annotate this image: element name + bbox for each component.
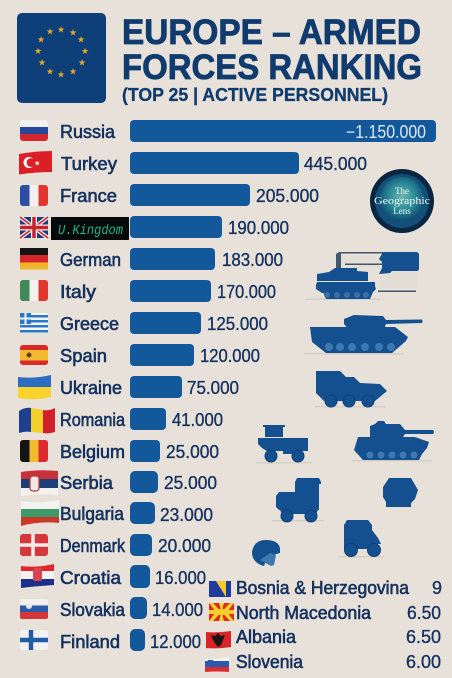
icon: Greece flag (20, 313, 48, 333)
icon: armored personnel carrier (315, 371, 387, 408)
row: Turkey: 445.000 (304, 154, 367, 174)
row: Belgium: Belgium (60, 442, 125, 462)
row: Denmark: Denmark (60, 536, 126, 556)
row: Ukraine (18, 375, 239, 399)
row: Croatia (21, 564, 206, 588)
logo: The Geographic Lens (370, 169, 434, 233)
row: Croatia: Croatia (60, 568, 122, 588)
row: France: France (60, 186, 117, 206)
icon: Slovakia flag (20, 599, 48, 619)
row: Serbia: 25.000 (164, 473, 217, 493)
title (122, 13, 422, 87)
icon: Romania flag (19, 408, 55, 433)
row: Greece: Greece (60, 314, 119, 334)
row: Serbia: Serbia (60, 473, 114, 493)
row: Bosnia & Herzegovina: 9 (432, 578, 442, 598)
logo: The Geographic Lens: Lens (393, 206, 411, 216)
icon: EU flag: ★ (46, 66, 54, 76)
row: Albania (206, 627, 441, 648)
row: Slovakia: 14.000 (152, 600, 203, 620)
row: Finland: 12.000 (150, 632, 201, 652)
icon: UK flag (20, 217, 48, 238)
icon: tank with glitched background (305, 252, 419, 300)
row: North Macedonia: North Macedonia (236, 603, 372, 623)
icon: Denmark flag (20, 534, 48, 556)
row: U.Kingdom: 190.000 (228, 218, 289, 238)
row: Turkey: Turkey (61, 154, 117, 174)
icon: armored vehicle (272, 478, 324, 522)
row: Denmark (20, 534, 211, 556)
icon: EU flag: ★ (38, 58, 46, 68)
row: U.Kingdom (20, 216, 289, 240)
row: Italy (20, 280, 276, 302)
icon: Italy flag (20, 280, 48, 301)
icon: Finland flag (20, 630, 48, 650)
icon: Turkey flag: ★ (34, 160, 40, 168)
row: Slovakia (20, 597, 203, 620)
row: Spain (20, 344, 260, 366)
row: Albania: Albania (236, 627, 297, 647)
row: Finland: Finland (60, 632, 120, 652)
title: EUROPE – ARMED (122, 13, 421, 52)
row: Croatia: 16.000 (155, 568, 206, 588)
row: Bulgaria: 23.000 (160, 505, 213, 525)
icon: Germany flag (20, 248, 48, 270)
row: Slovakia: Slovakia (60, 600, 126, 620)
icon: EU flag: ★ (57, 70, 65, 80)
row: Romania (19, 408, 223, 433)
icon: Albania flag (206, 631, 231, 648)
row: North Macedonia (209, 603, 441, 623)
icon: army truck (256, 425, 312, 464)
icon: EU flag: ★ (57, 24, 65, 34)
icon: North Macedonia flag (209, 603, 234, 621)
icon: EU flag: ★ (34, 46, 42, 56)
row: France: 205.000 (256, 186, 319, 206)
icon: Turkey flag (19, 151, 52, 174)
subtitle: (TOP 25 | ACTIVE PERSONNEL) (122, 85, 388, 105)
row: Albania: 6.50 (406, 627, 441, 647)
logo: The Geographic Lens: Geographic (374, 195, 430, 207)
row: Slovenia: Slovenia (236, 652, 304, 672)
icon: light tank (352, 421, 434, 462)
logo: The Geographic Lens: The (395, 186, 409, 196)
icon: Ukraine flag (18, 375, 51, 399)
row: Spain: 120.000 (200, 346, 260, 366)
row: Bulgaria (21, 500, 213, 526)
row: Russia: Russia (60, 122, 116, 142)
row: Russia: −1.150.000 (346, 122, 426, 142)
row: Bosnia & Herzegovina: Bosnia & Herzegovina (236, 578, 410, 598)
row: Spain: Spain (60, 346, 107, 366)
row: German (20, 248, 283, 270)
row: Belgium: 25.000 (166, 442, 219, 462)
row: Slovenia (205, 652, 441, 672)
icon: Belgium flag (20, 440, 48, 462)
row: German: 183.000 (222, 250, 283, 270)
row: Greece (20, 312, 268, 334)
row: Serbia (21, 470, 217, 496)
icon: Serbia flag (21, 470, 58, 496)
row: Russia (20, 120, 436, 142)
label: black U.Kingdom tag: U.Kingdom (58, 223, 124, 239)
icon: France flag (20, 185, 48, 206)
icon: soldier helmet (252, 540, 280, 566)
row: Greece: 125.000 (207, 314, 268, 334)
row: German: German (60, 250, 121, 270)
icon: Bulgaria flag (21, 500, 59, 526)
icon: Russia flag (20, 120, 48, 141)
row: Finland (20, 629, 201, 652)
row: Bulgaria: Bulgaria (60, 504, 125, 524)
icon: EU flag: ★ (81, 46, 89, 56)
icon: EU flag: ★ (69, 66, 77, 76)
row: Turkey (19, 151, 367, 174)
icon: EU flag: ★ (69, 28, 77, 38)
label: black U.Kingdom tag (51, 217, 129, 240)
icon: EU flag: ★ (78, 58, 86, 68)
row: Italy: 170.000 (217, 282, 276, 302)
row: Denmark: 20.000 (158, 536, 211, 556)
icon: Slovenia flag (205, 657, 229, 672)
icon: wheeled vehicle (338, 520, 384, 558)
row: France (20, 184, 319, 206)
icon: EU flag (17, 13, 106, 103)
row: Belgium (20, 440, 219, 462)
row: Italy: Italy (60, 282, 96, 302)
icon: EU flag: ★ (46, 26, 54, 36)
icon: helmet (383, 478, 418, 507)
row: North Macedonia: 6.50 (407, 603, 441, 623)
title: FORCES RANKING (122, 48, 422, 87)
icon: EU flag: ★ (37, 34, 45, 44)
icon: EU flag: ★ (77, 34, 85, 44)
row: Romania: 41.000 (172, 410, 223, 430)
icon: Bosnia flag (209, 581, 231, 597)
icon: Spain flag (20, 345, 48, 365)
icon: main battle tank (304, 315, 422, 354)
row: Ukraine: 75.000 (187, 378, 239, 398)
row: Romania: Romania (60, 410, 126, 430)
row: Slovenia: 6.00 (406, 652, 441, 672)
icon: Croatia flag (21, 564, 54, 588)
row: Ukraine: Ukraine (60, 378, 122, 398)
